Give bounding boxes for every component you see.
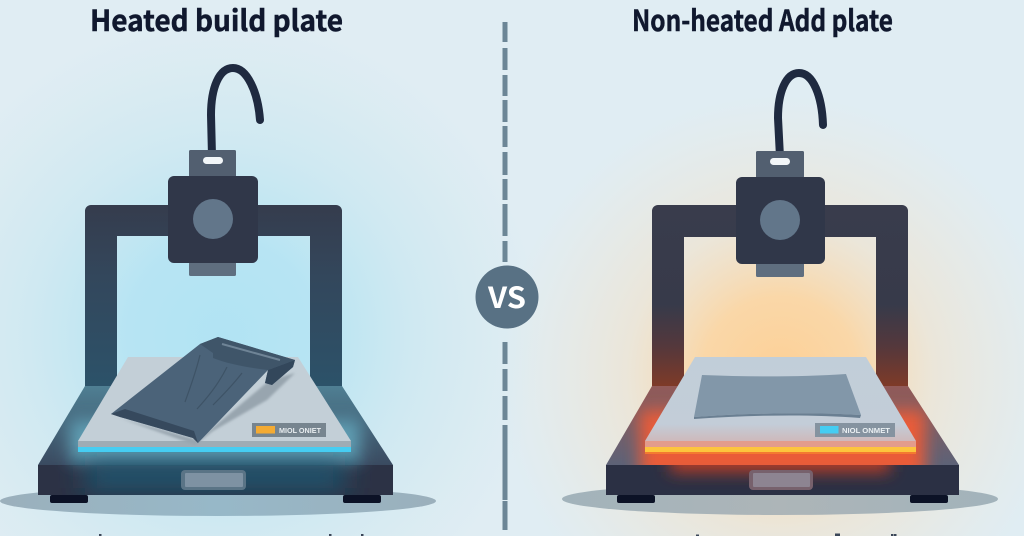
left base display — [181, 470, 246, 490]
left print head — [168, 68, 260, 276]
right printer frame — [652, 205, 908, 390]
right filament cable — [778, 73, 823, 157]
left printer frame — [85, 205, 342, 390]
shadow under right printer — [562, 483, 998, 515]
shadow under left printer — [0, 486, 436, 516]
right label — [815, 423, 895, 437]
left head nozzle circle — [193, 199, 233, 239]
right head mount — [756, 151, 804, 277]
right head block — [736, 177, 825, 264]
left label: MIOL ONIET — [279, 426, 321, 435]
VS badge — [476, 266, 538, 328]
right printer base — [606, 386, 959, 495]
left build plate — [78, 357, 351, 452]
left printer: heated — [0, 68, 436, 516]
right printer: non-heated — [562, 73, 998, 515]
right feet — [617, 495, 948, 503]
VS badge: VS — [487, 275, 526, 317]
right label: NIOL ONMET — [842, 426, 890, 435]
left printer base — [38, 386, 393, 495]
right print head — [736, 73, 825, 277]
dashed divider — [502, 22, 508, 530]
right build plate — [645, 357, 916, 454]
right base display — [749, 470, 813, 490]
left filament cable — [211, 68, 260, 156]
left label — [252, 423, 326, 437]
left head mount — [189, 150, 236, 276]
left head block — [168, 176, 258, 263]
left printed part: warped — [111, 337, 295, 443]
cropped caption tops — [99, 534, 896, 536]
right head nozzle circle — [760, 200, 800, 240]
right flat printed part — [694, 374, 861, 419]
left feet — [50, 495, 381, 503]
left printed part shadow — [120, 373, 295, 445]
